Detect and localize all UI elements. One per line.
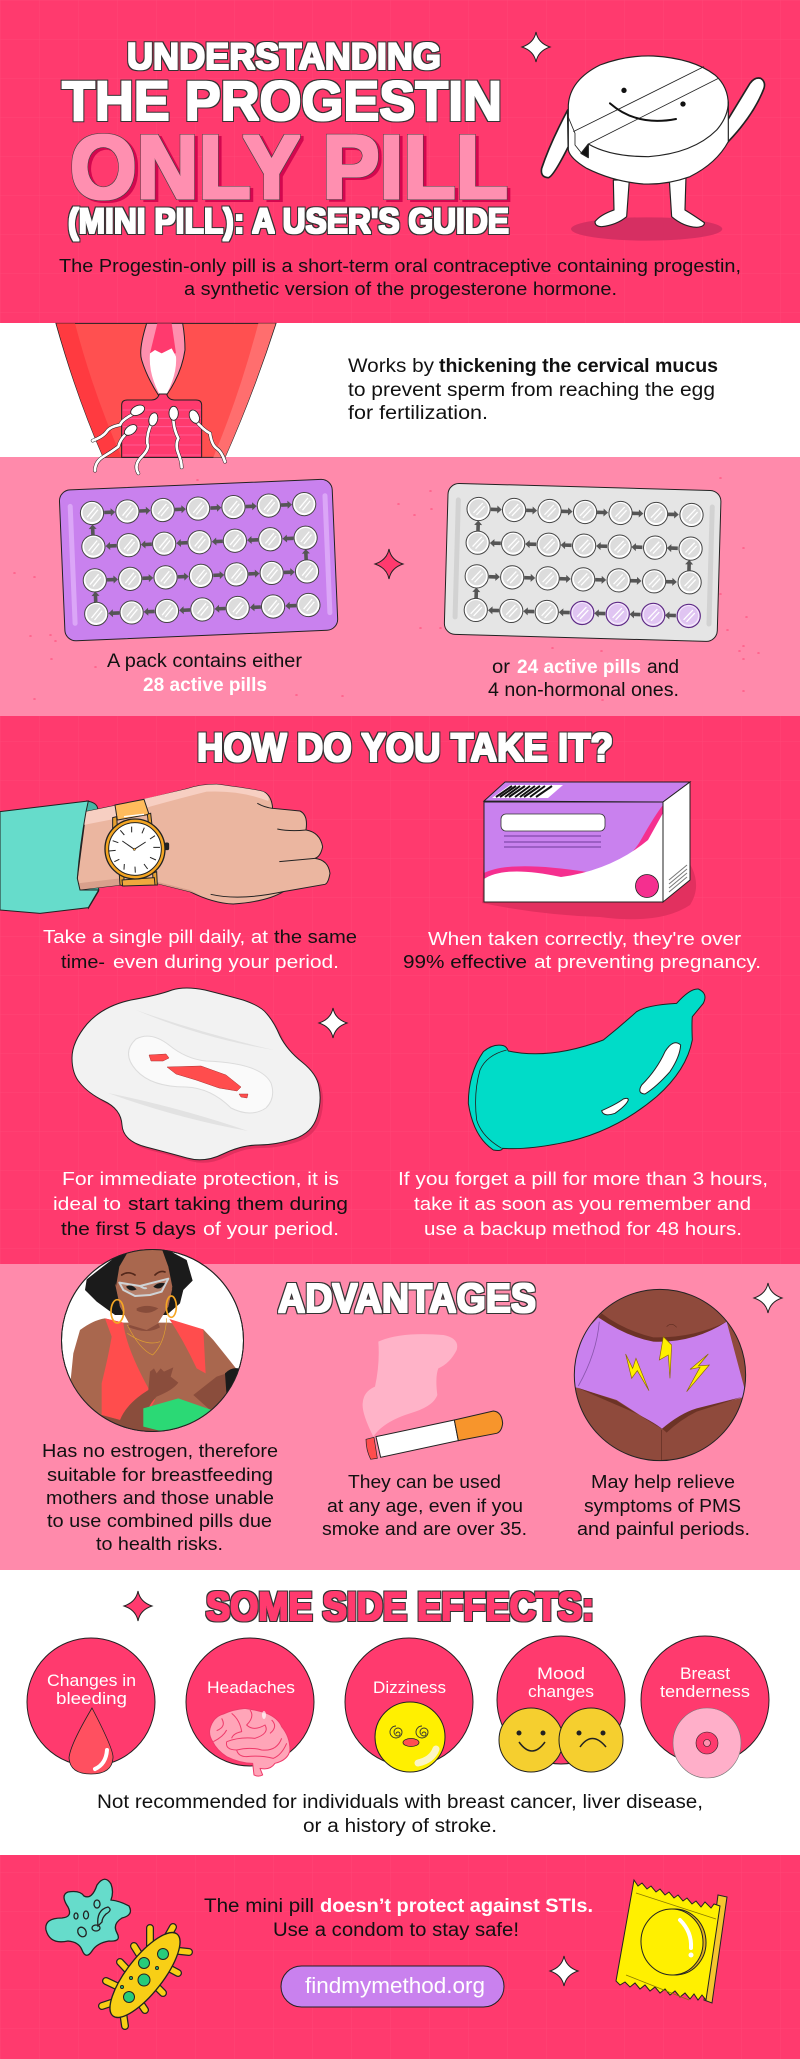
text: forgotten pill: If you forget a pill for more than 3 hours, — [398, 1169, 768, 1189]
text: over 99% effective: at preventing pregnancy. — [534, 952, 761, 972]
text: PMS relief: symptoms of PMS — [584, 1496, 741, 1516]
side effect: changes in bleeding — [27, 1638, 155, 1774]
text: 28 active pills: A pack contains either — [107, 651, 303, 672]
icon: yellow bacteria — [99, 1923, 191, 2027]
button: findmymethod.org — [281, 1966, 504, 2007]
text: take a single pill daily: Take a single pill daily, at — [43, 927, 268, 947]
text: no STI protection: The mini pill — [204, 1896, 314, 1917]
illustration: sanitary pad — [72, 988, 323, 1163]
text: intro — [59, 256, 741, 299]
text: 24 active pills: 24 active pills — [517, 657, 641, 678]
text: any age — [322, 1472, 527, 1539]
text: thickening the cervical mucus: to prevent sperm from reaching the egg — [348, 380, 715, 401]
text: immediate protection: For immediate protection, it is — [62, 1169, 339, 1189]
icon: smiling pill character — [541, 56, 765, 241]
text: take a single pill daily: time- — [61, 952, 105, 972]
side effect: headaches — [186, 1638, 314, 1776]
text: 24 active pills — [488, 657, 679, 701]
side effect: breast tenderness: Breast — [680, 1665, 730, 1683]
text: any age: smoke and are over 35. — [322, 1519, 527, 1539]
icon: condom packet — [616, 1880, 727, 2003]
side effect: dizziness: Dizziness — [373, 1679, 446, 1697]
text: thickening the cervical mucus: Works by — [348, 356, 435, 377]
illustration: cigarette with smoke — [363, 1334, 503, 1459]
icon: teal germ — [46, 1879, 130, 1955]
title: (MINI PILL): A USER'S GUIDE — [68, 202, 509, 241]
text: immediate protection: start taking them during — [128, 1194, 348, 1214]
title: THE PROGESTIN — [62, 69, 502, 132]
text: not recommended: or a history of stroke. — [303, 1816, 497, 1837]
text: take a single pill daily: even during your period. — [113, 952, 339, 972]
text: no STI protection: Use a condom to stay safe! — [273, 1920, 519, 1941]
text: immediate protection: the first 5 days — [61, 1219, 196, 1239]
text: intro: The Progestin-only pill is a short-term oral contraceptive containing progestin, — [59, 256, 741, 276]
icon: sparkle — [754, 1283, 782, 1313]
text: immediate protection — [53, 1169, 348, 1239]
text: not recommended — [97, 1792, 703, 1837]
text: no estrogen: Has no estrogen, therefore — [42, 1441, 278, 1461]
title: ONLY PILL — [70, 118, 508, 218]
panel: header — [0, 0, 800, 323]
side effect: dizziness — [345, 1638, 473, 1772]
icon: sparkle — [550, 1956, 578, 1986]
text: not recommended: Not recommended for individuals with breast cancer, liver disease, — [97, 1792, 703, 1813]
text: take a single pill daily — [43, 927, 357, 972]
side effect: mood changes: Mood — [537, 1665, 585, 1683]
side effect: mood changes: changes — [528, 1683, 594, 1701]
panel: how do you take it — [0, 716, 800, 1264]
icon: sparkle — [522, 32, 550, 62]
text: 24 active pills: 4 non-hormonal ones. — [488, 680, 679, 701]
panel: how it works — [0, 323, 800, 473]
text: 28 active pills — [107, 651, 303, 696]
text: no estrogen: to health risks. — [96, 1534, 223, 1554]
text: over 99% effective: 99% effective — [403, 952, 527, 972]
text: thickening the cervical mucus — [348, 356, 718, 424]
title — [62, 36, 509, 241]
text: take a single pill daily: the same — [274, 927, 357, 947]
panel: side effects — [0, 1570, 800, 1855]
text: immediate protection: of your period. — [203, 1219, 339, 1239]
text: 28 active pills: 28 active pills — [143, 675, 267, 696]
panel: advantages — [0, 1248, 800, 1570]
icon: sparkle — [375, 549, 403, 579]
side effect: breast tenderness: tenderness — [660, 1683, 750, 1701]
illustration: breastfeeding mother — [62, 1248, 244, 1440]
heading: how do you take it: HOW DO YOU TAKE IT? — [197, 726, 613, 770]
text: PMS relief: May help relieve — [591, 1472, 735, 1492]
text: any age: They can be used — [348, 1472, 501, 1492]
text: no estrogen: to use combined pills due — [47, 1511, 272, 1531]
illustration: hand with wristwatch — [0, 784, 330, 913]
text: over 99% effective: When taken correctly, they're over — [428, 929, 741, 949]
text: no estrogen — [42, 1441, 278, 1554]
text: immediate protection: ideal to — [53, 1194, 121, 1214]
text: forgotten pill — [398, 1169, 768, 1239]
illustration: pill box — [482, 782, 696, 919]
text: intro: a synthetic version of the progesterone hormone. — [184, 279, 617, 299]
illustration: condom — [468, 989, 705, 1151]
side effect: changes in bleeding: bleeding — [56, 1690, 127, 1708]
text: thickening the cervical mucus: for fertilization. — [348, 403, 488, 424]
text: forgotten pill: use a backup method for 48 hours. — [424, 1219, 742, 1239]
text: PMS relief: and painful periods. — [577, 1519, 750, 1539]
icon: sparkle — [124, 1591, 152, 1621]
side effect: breast tenderness — [641, 1636, 769, 1778]
illustration: cervical mucus and sperm — [56, 323, 276, 473]
panel: footer — [0, 1855, 800, 2059]
text: no STI protection: doesn’t protect against STIs. — [320, 1896, 593, 1917]
panel: pack types — [0, 457, 800, 717]
side effect: mood changes — [497, 1636, 625, 1772]
blister pack: 24 active and 4 non-hormonal pills — [444, 483, 721, 642]
text: thickening the cervical mucus: thickening the cervical mucus — [439, 356, 718, 377]
text: 24 active pills: or — [492, 657, 511, 678]
text: no estrogen: mothers and those unable — [46, 1488, 274, 1508]
text: over 99% effective — [403, 929, 761, 972]
text: no estrogen: suitable for breastfeeding — [47, 1465, 273, 1485]
icon: sparkle — [319, 1008, 347, 1038]
heading: advantages: ADVANTAGES — [278, 1275, 536, 1321]
title: UNDERSTANDING — [127, 36, 441, 77]
side effect: changes in bleeding: Changes in — [47, 1672, 136, 1690]
text: PMS relief — [577, 1472, 750, 1539]
button: findmymethod.org: findmymethod.org — [305, 1973, 485, 1998]
blister pack: 28 active pills — [59, 479, 338, 641]
text: 24 active pills: and — [647, 657, 679, 678]
heading: some side effects: SOME SIDE EFFECTS: — [206, 1585, 594, 1629]
text: any age: at any age, even if you — [327, 1496, 523, 1516]
text: no STI protection — [204, 1896, 593, 1941]
text: forgotten pill: take it as soon as you remember and — [414, 1194, 751, 1214]
side effect: headaches: Headaches — [207, 1679, 295, 1697]
illustration: underwear with cramps — [570, 1289, 747, 1461]
